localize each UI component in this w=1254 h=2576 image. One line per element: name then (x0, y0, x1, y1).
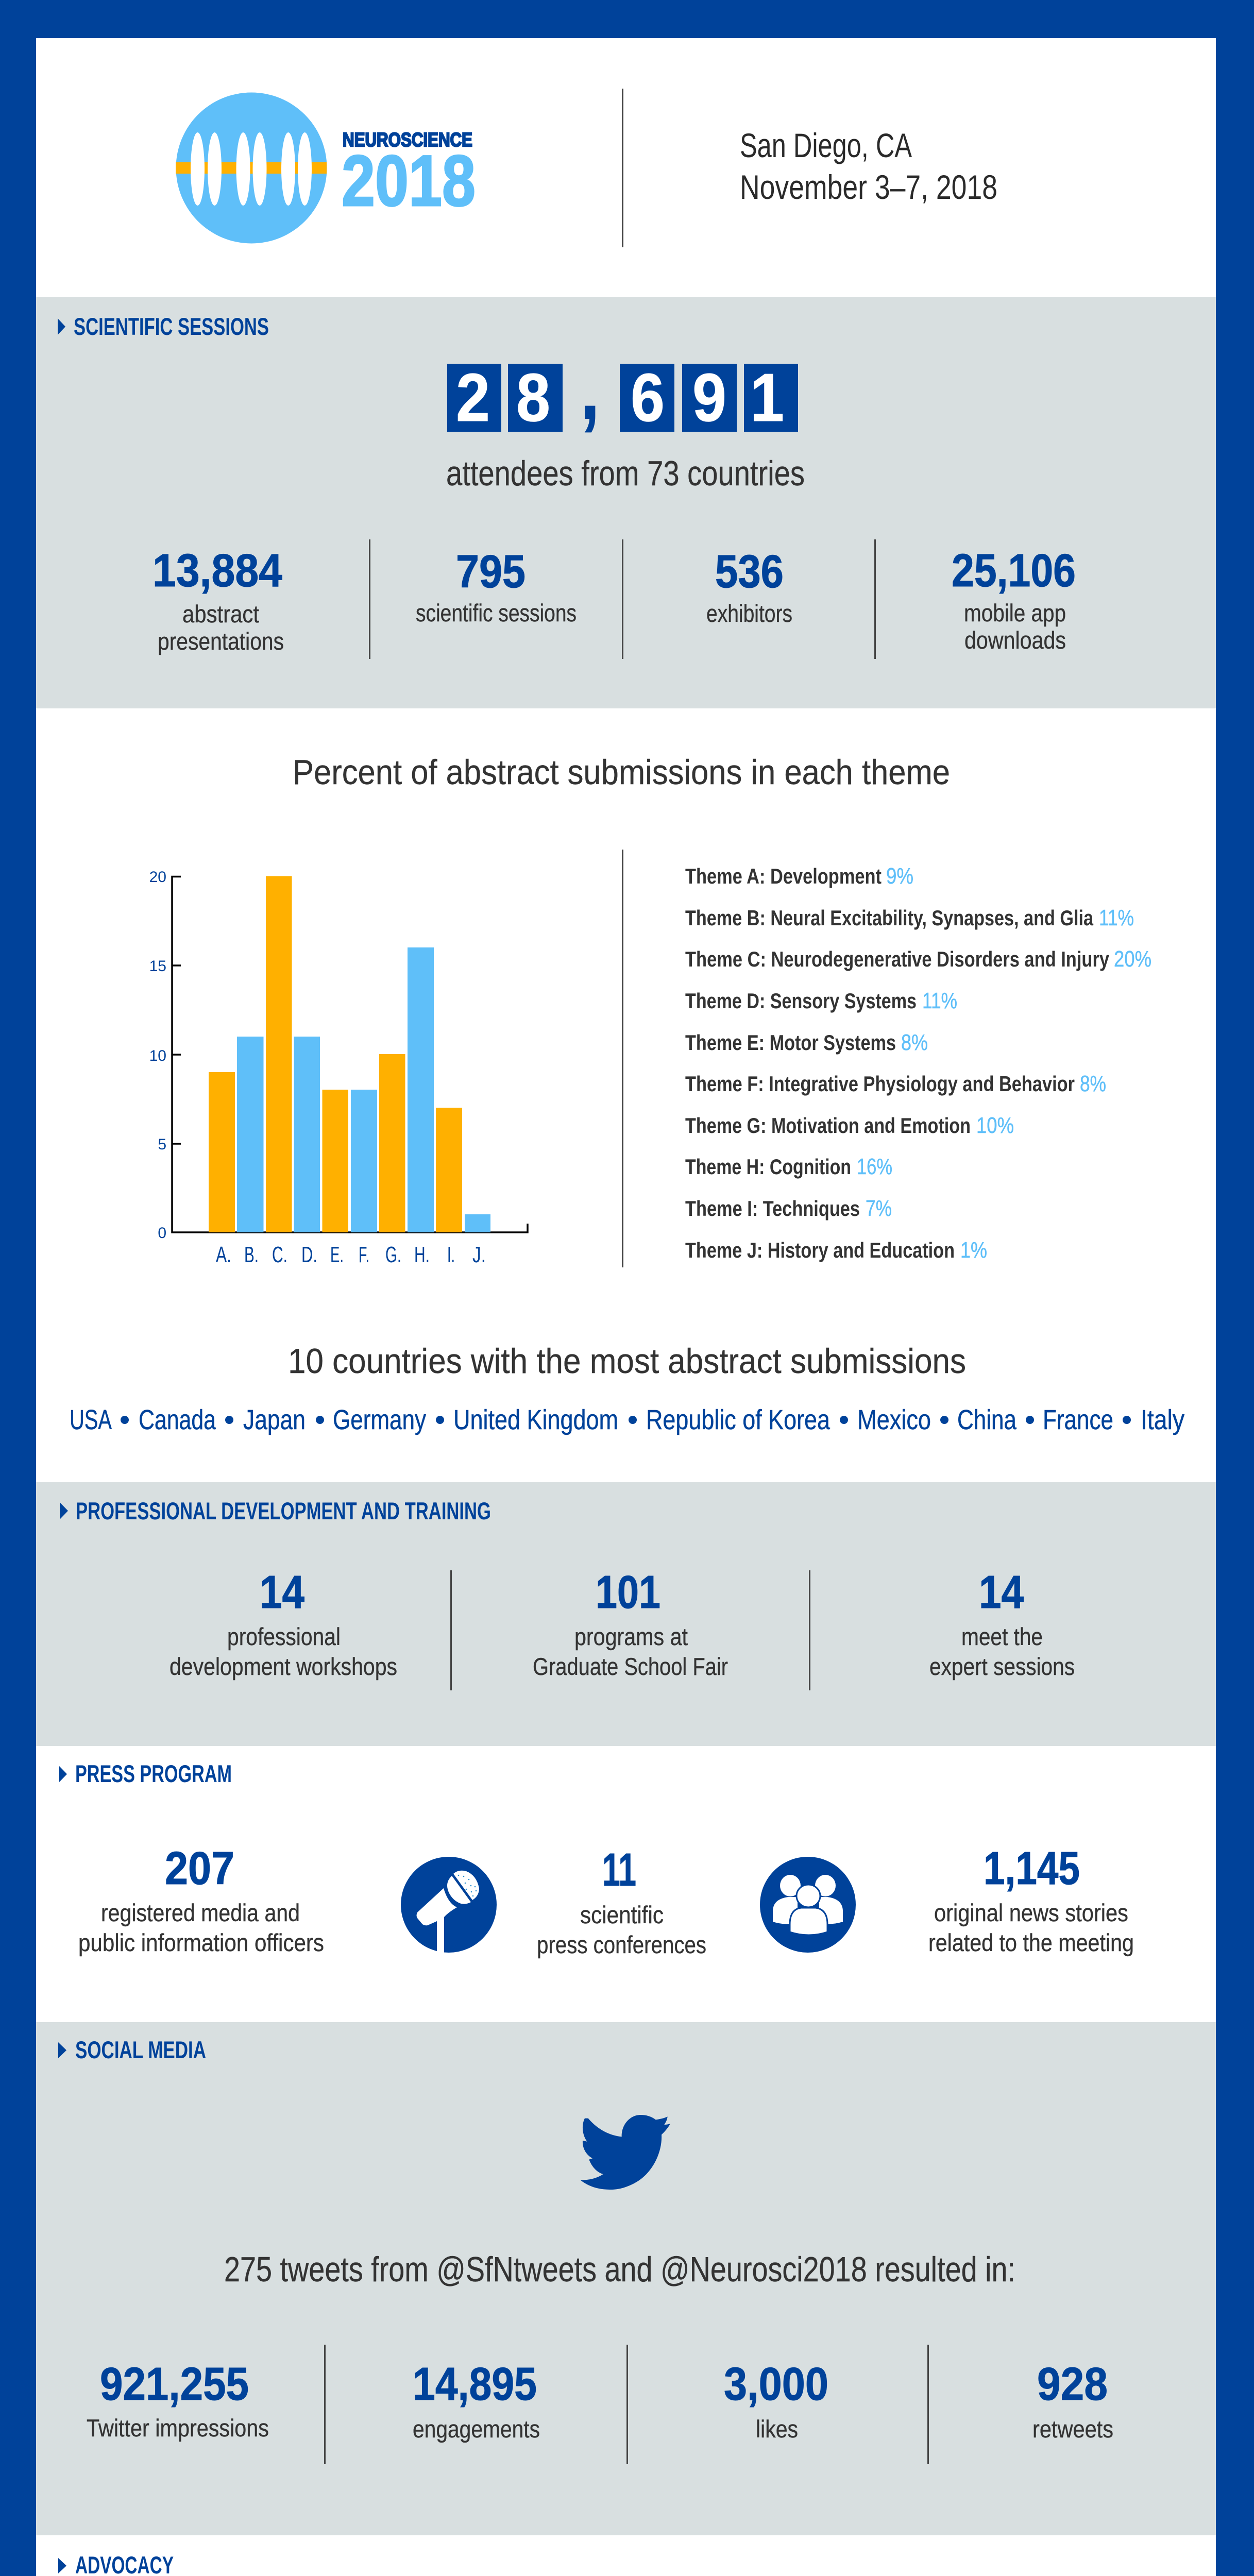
y axis labels: 0 (158, 1225, 166, 1242)
stat: press conferences: scientific (580, 1901, 664, 1928)
stat: mobile app downloads: mobile app (964, 599, 1066, 626)
stat: twitter impressions: Twitter impressions (87, 2414, 269, 2442)
stat: graduate school fair: programs at (574, 1623, 688, 1650)
location and dates (740, 126, 997, 206)
x axis labels: A. (216, 1242, 231, 1267)
y axis labels: 15 (149, 958, 166, 975)
icon: microphone (401, 1857, 497, 1953)
stat: engagements: 14,895 (413, 2359, 537, 2410)
stat: graduate school fair: 101 (596, 1567, 660, 1618)
country list: Mexico (857, 1404, 931, 1435)
attendee counter: 28,691: 9 (692, 360, 726, 435)
y axis labels (149, 869, 166, 1242)
attendee counter: 28,691: 1 (750, 360, 784, 435)
x axis labels: D. (301, 1242, 317, 1267)
stat: meet the expert: meet the (961, 1623, 1043, 1650)
theme legend list: 11% (922, 988, 957, 1013)
stat: retweets: 928 (1037, 2359, 1108, 2410)
panel: header (36, 38, 1216, 297)
theme legend list: 10% (976, 1113, 1014, 1138)
country list (70, 1404, 1184, 1435)
stat: meet the expert: 14 (979, 1567, 1024, 1618)
attendee counter: 28,691: 2 (456, 360, 490, 435)
panel: scientific sessions (36, 297, 1216, 708)
stat: press conferences: press conferences (537, 1931, 706, 1958)
country list: Italy (1141, 1404, 1184, 1435)
country list: France (1043, 1404, 1113, 1435)
stat: meet the expert (929, 1567, 1075, 1680)
stat: abstract presentations: presentations (158, 628, 284, 655)
attendee counter: 28,691: 8 (516, 360, 550, 435)
stat: retweets: retweets (1032, 2415, 1113, 2443)
heading: press program (59, 1760, 232, 1787)
country list: Republic of Korea (646, 1404, 831, 1435)
heading: top 10 countries: 10 countries with the most abstract submissions (288, 1342, 966, 1381)
heading: scientific sessions (58, 313, 269, 340)
stat: abstract presentations (152, 545, 284, 655)
stat: registered media (78, 1843, 324, 1956)
theme legend list: 7% (866, 1196, 892, 1221)
stat: news stories: 1,145 (984, 1843, 1080, 1894)
theme legend list: 9% (886, 863, 913, 889)
theme legend list: 8% (1080, 1071, 1106, 1096)
theme legend list (685, 863, 1151, 1263)
stat: news stories: original news stories (934, 1899, 1128, 1926)
stat: exhibitors (706, 546, 792, 627)
stat: scientific sessions: scientific sessions (416, 599, 577, 626)
attendee counter: 28,691: , (580, 340, 600, 438)
bar chart: submissions by theme (149, 869, 528, 1267)
attendee counter: 28,691: 6 (631, 360, 665, 435)
stat: twitter impressions: 921,255 (100, 2359, 249, 2410)
stat: workshops (170, 1567, 397, 1680)
heading: advocacy (58, 2551, 174, 2576)
country list: Canada (139, 1404, 216, 1435)
theme legend list: Theme A: Development (685, 864, 882, 888)
stat: graduate school fair: Graduate School Fair (533, 1653, 728, 1680)
panel: press program (36, 1746, 1216, 2022)
logo: Neuroscience 2018 (176, 93, 476, 243)
stat: graduate school fair (533, 1567, 728, 1680)
theme legend list: 1% (960, 1238, 987, 1263)
heading: scientific sessions: SCIENTIFIC SESSIONS (74, 313, 269, 340)
x axis labels: B. (244, 1242, 259, 1267)
logo emblem (176, 93, 327, 243)
stat: registered media: registered media and (101, 1899, 300, 1926)
icon: group of people (760, 1857, 856, 1953)
x axis labels: I. (447, 1242, 455, 1267)
stat: likes: likes (756, 2415, 798, 2443)
stat: abstract presentations: abstract (182, 600, 259, 628)
stat: press conferences (537, 1844, 706, 1958)
theme legend list: Theme E: Motor Systems (685, 1030, 896, 1055)
country list: Japan (243, 1404, 306, 1435)
stat: mobile app downloads: 25,106 (952, 545, 1076, 597)
stat: scientific sessions (416, 546, 577, 626)
stat: engagements: engagements (413, 2415, 540, 2443)
panel: abstract submissions (36, 708, 1216, 1482)
heading: professional development: PROFESSIONAL DEVELOPMENT AND TRAINING (76, 1497, 491, 1524)
theme legend list: Theme H: Cognition (685, 1155, 851, 1179)
theme legend list: 11% (1099, 905, 1134, 930)
theme legend list: 20% (1114, 946, 1151, 972)
logo wordmark: NEUROSCIENCE (343, 129, 472, 151)
country list: United Kingdom (453, 1404, 618, 1435)
country list: Germany (333, 1404, 426, 1435)
bars (209, 876, 490, 1232)
tweets summary: 275 tweets from @SfNtweets and @Neurosci2018 resulted in: (224, 2250, 1015, 2289)
stat: meet the expert: expert sessions (929, 1653, 1075, 1680)
stat: exhibitors: 536 (715, 546, 784, 598)
stat: retweets (1032, 2359, 1113, 2443)
stat: likes (724, 2359, 828, 2443)
stat: likes: 3,000 (724, 2359, 828, 2410)
x axis labels: E. (330, 1242, 344, 1267)
x axis labels: J. (472, 1242, 486, 1267)
theme legend list: Theme C: Neurodegenerative Disorders and Injury (685, 947, 1110, 971)
panel: social media (36, 2022, 1216, 2535)
stat: engagements (413, 2359, 540, 2443)
panel: professional development and training (36, 1482, 1216, 1746)
attendee counter: 28,691 (447, 340, 798, 438)
y axis labels: 5 (158, 1136, 166, 1153)
stat: abstract presentations: 13,884 (152, 545, 282, 597)
stat: scientific sessions: 795 (456, 546, 526, 598)
theme legend list: Theme F: Integrative Physiology and Behavior (685, 1072, 1075, 1096)
x axis labels: H. (414, 1242, 430, 1267)
x axis labels: C. (272, 1242, 287, 1267)
country list: China (957, 1404, 1017, 1435)
theme legend list: 8% (901, 1030, 928, 1055)
attendee caption: attendees from 73 countries (446, 454, 805, 493)
theme legend list: Theme G: Motivation and Emotion (685, 1113, 971, 1138)
stat: twitter impressions (87, 2359, 269, 2442)
theme legend list: Theme D: Sensory Systems (685, 989, 917, 1013)
theme legend list: Theme B: Neural Excitability, Synapses, and Glia (685, 906, 1094, 930)
country list: USA (70, 1404, 112, 1435)
stat: workshops: professional (227, 1623, 341, 1650)
x axis labels: G. (385, 1242, 401, 1267)
stat: news stories: related to the meeting (928, 1929, 1134, 1956)
x axis labels: F. (359, 1242, 369, 1267)
panel: advocacy (36, 2535, 1216, 2576)
heading: percent of abstract submissions: Percent of abstract submissions in each theme (293, 753, 950, 792)
location and dates: San Diego, CA (740, 126, 912, 164)
x axis labels (216, 1242, 486, 1267)
stat: press conferences: 11 (602, 1844, 636, 1896)
stat: registered media: public information officers (78, 1929, 324, 1956)
theme legend list: Theme J: History and Education (685, 1238, 955, 1262)
stat: workshops: 14 (260, 1567, 304, 1618)
logo year: 2018 (342, 140, 476, 221)
location and dates: November 3–7, 2018 (740, 168, 997, 206)
heading: social media (58, 2036, 206, 2063)
stat: workshops: development workshops (170, 1653, 397, 1680)
theme legend list: Theme I: Techniques (685, 1196, 860, 1221)
stat: news stories (928, 1843, 1134, 1956)
y axis labels: 10 (149, 1047, 166, 1064)
stat: exhibitors: exhibitors (706, 600, 792, 627)
stat: mobile app downloads: downloads (964, 626, 1066, 654)
icon: twitter bird (581, 2115, 670, 2190)
heading: social media: SOCIAL MEDIA (75, 2036, 206, 2063)
stat: registered media: 207 (165, 1843, 234, 1894)
theme legend list: 16% (857, 1154, 892, 1179)
stat: mobile app downloads (952, 545, 1076, 654)
heading: press program: PRESS PROGRAM (75, 1760, 232, 1787)
y axis labels: 20 (149, 869, 166, 886)
